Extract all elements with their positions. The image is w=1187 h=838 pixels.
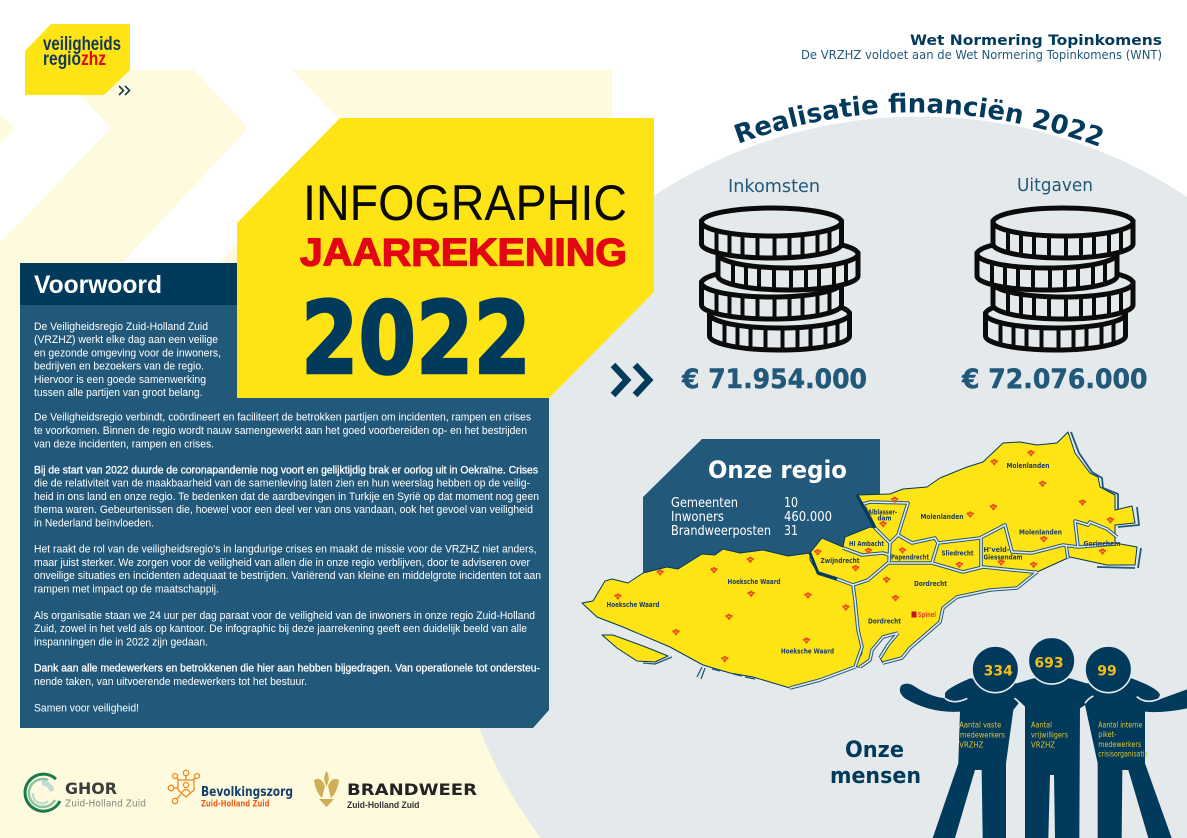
person 3 figures: medewerkers [1098,740,1141,749]
map place names: Sliedrecht [942,550,974,558]
person 1 figures: Aantal vaste [959,721,1001,730]
key figures: Inwoners [671,510,724,525]
header: wet normering topinkomens: Wet Normering Topinkomens [910,33,1162,49]
logo: brandweer: Zuid-Holland Zuid [347,800,420,810]
icon: coin stack uitgaven [977,208,1133,350]
logo: veiligheidsregio zhz: veiligheids [43,34,121,55]
marker: spinel: Spinel [918,611,936,619]
person 2 figures: VRZHZ [1031,741,1055,750]
header: wet normering topinkomens [801,33,1162,62]
heading: onze mensen: Onze [845,738,904,763]
people illustration [900,637,1187,838]
key figures: 31 [784,524,798,539]
person 3 figures [1097,664,1148,759]
map place names: Hoeksche Waard [606,601,660,609]
crest markers [614,450,1114,663]
map place names: Hoeksche Waard [781,648,834,656]
person 1 figures [959,664,1013,750]
person 2 figures: Aantal [1031,721,1052,730]
marker: spinel [912,611,936,619]
text block: voorwoord body: Het raakt de rol van de veiligheidsregio’s in langdurige crises en maakt de missie voor de VRZHZ niet anders, [34,544,536,556]
map place names: H’veld- [984,546,1010,554]
person 3 figures: crisisorganisatie [1098,750,1148,759]
text block: voorwoord body: onveilige situaties en incidenten adequaat te bestrijden. Variërend van kleine en middelgrote incidenten tot aan [34,570,541,582]
panel: voorwoord [20,263,549,728]
curved heading: realisatie financien 2022: Realisatie financiën 2022 [734,92,1103,146]
heading: onze mensen [830,738,921,789]
map place names: Molenlanden [920,513,964,521]
map place names: Gorinchem [1084,540,1120,548]
heading: onze regio: Onze regio [708,456,847,484]
key figures: 460.000 [784,510,832,525]
text block: voorwoord body: Samen voor veiligheid! [34,702,139,714]
logo: ghor [25,774,146,811]
text block: voorwoord body: rampen met impact op de maatschappij. [34,583,219,595]
text block: voorwoord body: Dank aan alle medewerkers en betrokkenen die hier aan hebben bijgedragen. Van operationele tot ondersteu- [34,663,540,675]
map place names: HI Ambacht [849,540,884,548]
title: year 2022: 2022 [301,280,531,397]
map place names: dam [878,514,892,522]
text block: voorwoord body: bedrijven en bezoekers van de regio. [34,361,204,373]
logo: ghor: GHOR [65,779,117,798]
text block: voorwoord body: Zuid, zowel in het veld als op kantoor. De infographic bij deze jaarrekening geeft een duidelijk beeld van alle [34,623,527,635]
key figures [671,496,832,539]
logo: veiligheidsregio zhz: zhz [81,49,106,70]
map place names: Molenlanden [1006,462,1050,470]
text block: voorwoord body: Bij de start van 2022 duurde de coronapandemie nog voort en gelijktijdig brak er oorlog uit in Oekraïne. Crises [34,464,538,476]
title: jaarrekening: JAARREKENING [300,232,627,274]
text block: voorwoord body: die de relativiteit van de maakbaarheid van de samenleving laten zien en hun weerslag hebben op de veilig- [34,478,530,490]
small chevrons [119,86,130,95]
text block: voorwoord body: in Nederland beïnvloeden. [34,517,154,529]
logo: brandweer: BRANDWEER [347,780,477,799]
text block: voorwoord body: heid in ons land en onze regio. Te bedenken dat de aardbevingen in Turkije en Syrië op dat moment nog geen [34,491,539,503]
text block: voorwoord body: nende taken, van uitvoerende medewerkers tot het bestuur. [34,676,307,688]
label: inkomsten: Inkomsten [728,177,820,197]
panel: onze regio [643,439,880,577]
logo: brandweer [314,771,477,810]
person 1 figures: VRZHZ [959,741,984,750]
text block: voorwoord body [34,321,541,714]
logo: bevolkingszorg: Bevolkingszorg [201,785,293,800]
map place names: Zwijndrecht [820,557,860,565]
logo: bevolkingszorg [168,770,293,810]
amount: uitgaven: € 72.076.000 [961,364,1148,395]
text block: voorwoord body: maar juist sterker. We zorgen voor de veiligheid van allen die in onze regio verblijven, door te adviseren over [34,557,530,569]
yellow title block [237,118,654,398]
text block: voorwoord body: van deze incidenten, rampen en crises. [34,438,214,450]
logo: bevolkingszorg: Zuid-Holland Zuid [201,800,270,810]
person 3 figures: Aantal interne [1098,721,1142,730]
key figures: Brandweerposten [671,524,771,539]
amount: inkomsten: € 71.954.000 [681,364,867,395]
text block: voorwoord body: Als organisatie staan we 24 uur per dag paraat voor de veiligheid van de inwoners in onze regio Zuid-Holland [34,610,535,622]
heading: onze mensen: mensen [830,764,921,789]
person 1 figures: medewerkers [960,731,1005,740]
text block: voorwoord body: (VRZHZ) werkt elke dag aan een veilige [34,334,218,346]
person 1 figures: 334 [984,664,1013,680]
text block: voorwoord body: De Veiligheidsregio Zuid-Holland Zuid [34,321,208,333]
person 2 figures: 693 [1034,656,1064,672]
label: uitgaven: Uitgaven [1017,176,1093,196]
key figures: Gemeenten [671,496,738,511]
text block: voorwoord body: Hiervoor is een goede samenwerking [34,374,206,386]
map place names: Hoeksche Waard [728,578,780,586]
background ellipse [450,117,1187,838]
text block: voorwoord body: te voorkomen. Binnen de regio wordt nauw samengewerkt aan het goed voorbereiden op- en het bestrijden [34,425,527,437]
map place names: Dordrecht [914,580,948,588]
text block: voorwoord body: en gezonde omgeving voor de inwoners, [34,347,221,359]
map place names: Alblasser- [868,508,897,516]
logo: veiligheidsregio zhz: regio [43,49,81,70]
map: onze regio [582,432,1141,688]
person 2 figures [1031,656,1068,750]
map place names: Papendrecht [891,554,929,562]
text block: voorwoord body: inspanningen die in 2022 zijn gedaan. [34,636,208,648]
person 3 figures: piket- [1098,730,1116,739]
icon: coin stack inkomsten [702,208,858,350]
map place names: Dordrecht [868,618,902,626]
text block: voorwoord body: De Veiligheidsregio verbindt, coördineert en faciliteert de betrokken partijen om incidenten, rampen en crises [34,412,531,424]
map place names: Giessendam [984,554,1022,562]
background chevrons [0,70,620,838]
heading: voorwoord: Voorwoord [34,271,162,299]
arrow: double chevron [613,365,649,395]
text block: voorwoord body: thema waren. Gebeurtenissen die, hoewel voor een deel ver van ons vandaan, ook het gevoel van veiligheid [34,504,533,516]
title: infographic: INFOGRAPHIC [303,175,627,231]
logo: veiligheidsregio zhz [25,24,130,95]
text block: voorwoord body: tussen alle partijen van groot belang. [34,387,202,399]
map place names [606,462,1120,656]
person 3 figures: 99 [1097,664,1117,680]
header: wet normering topinkomens: De VRZHZ voldoet aan de Wet Normering Topinkomens (WNT) [801,48,1162,62]
person 2 figures: vrijwilligers [1031,731,1068,740]
key figures: 10 [784,496,798,511]
map place names: Molenlanden [1019,528,1062,536]
logo: ghor: Zuid-Holland Zuid [65,799,146,810]
